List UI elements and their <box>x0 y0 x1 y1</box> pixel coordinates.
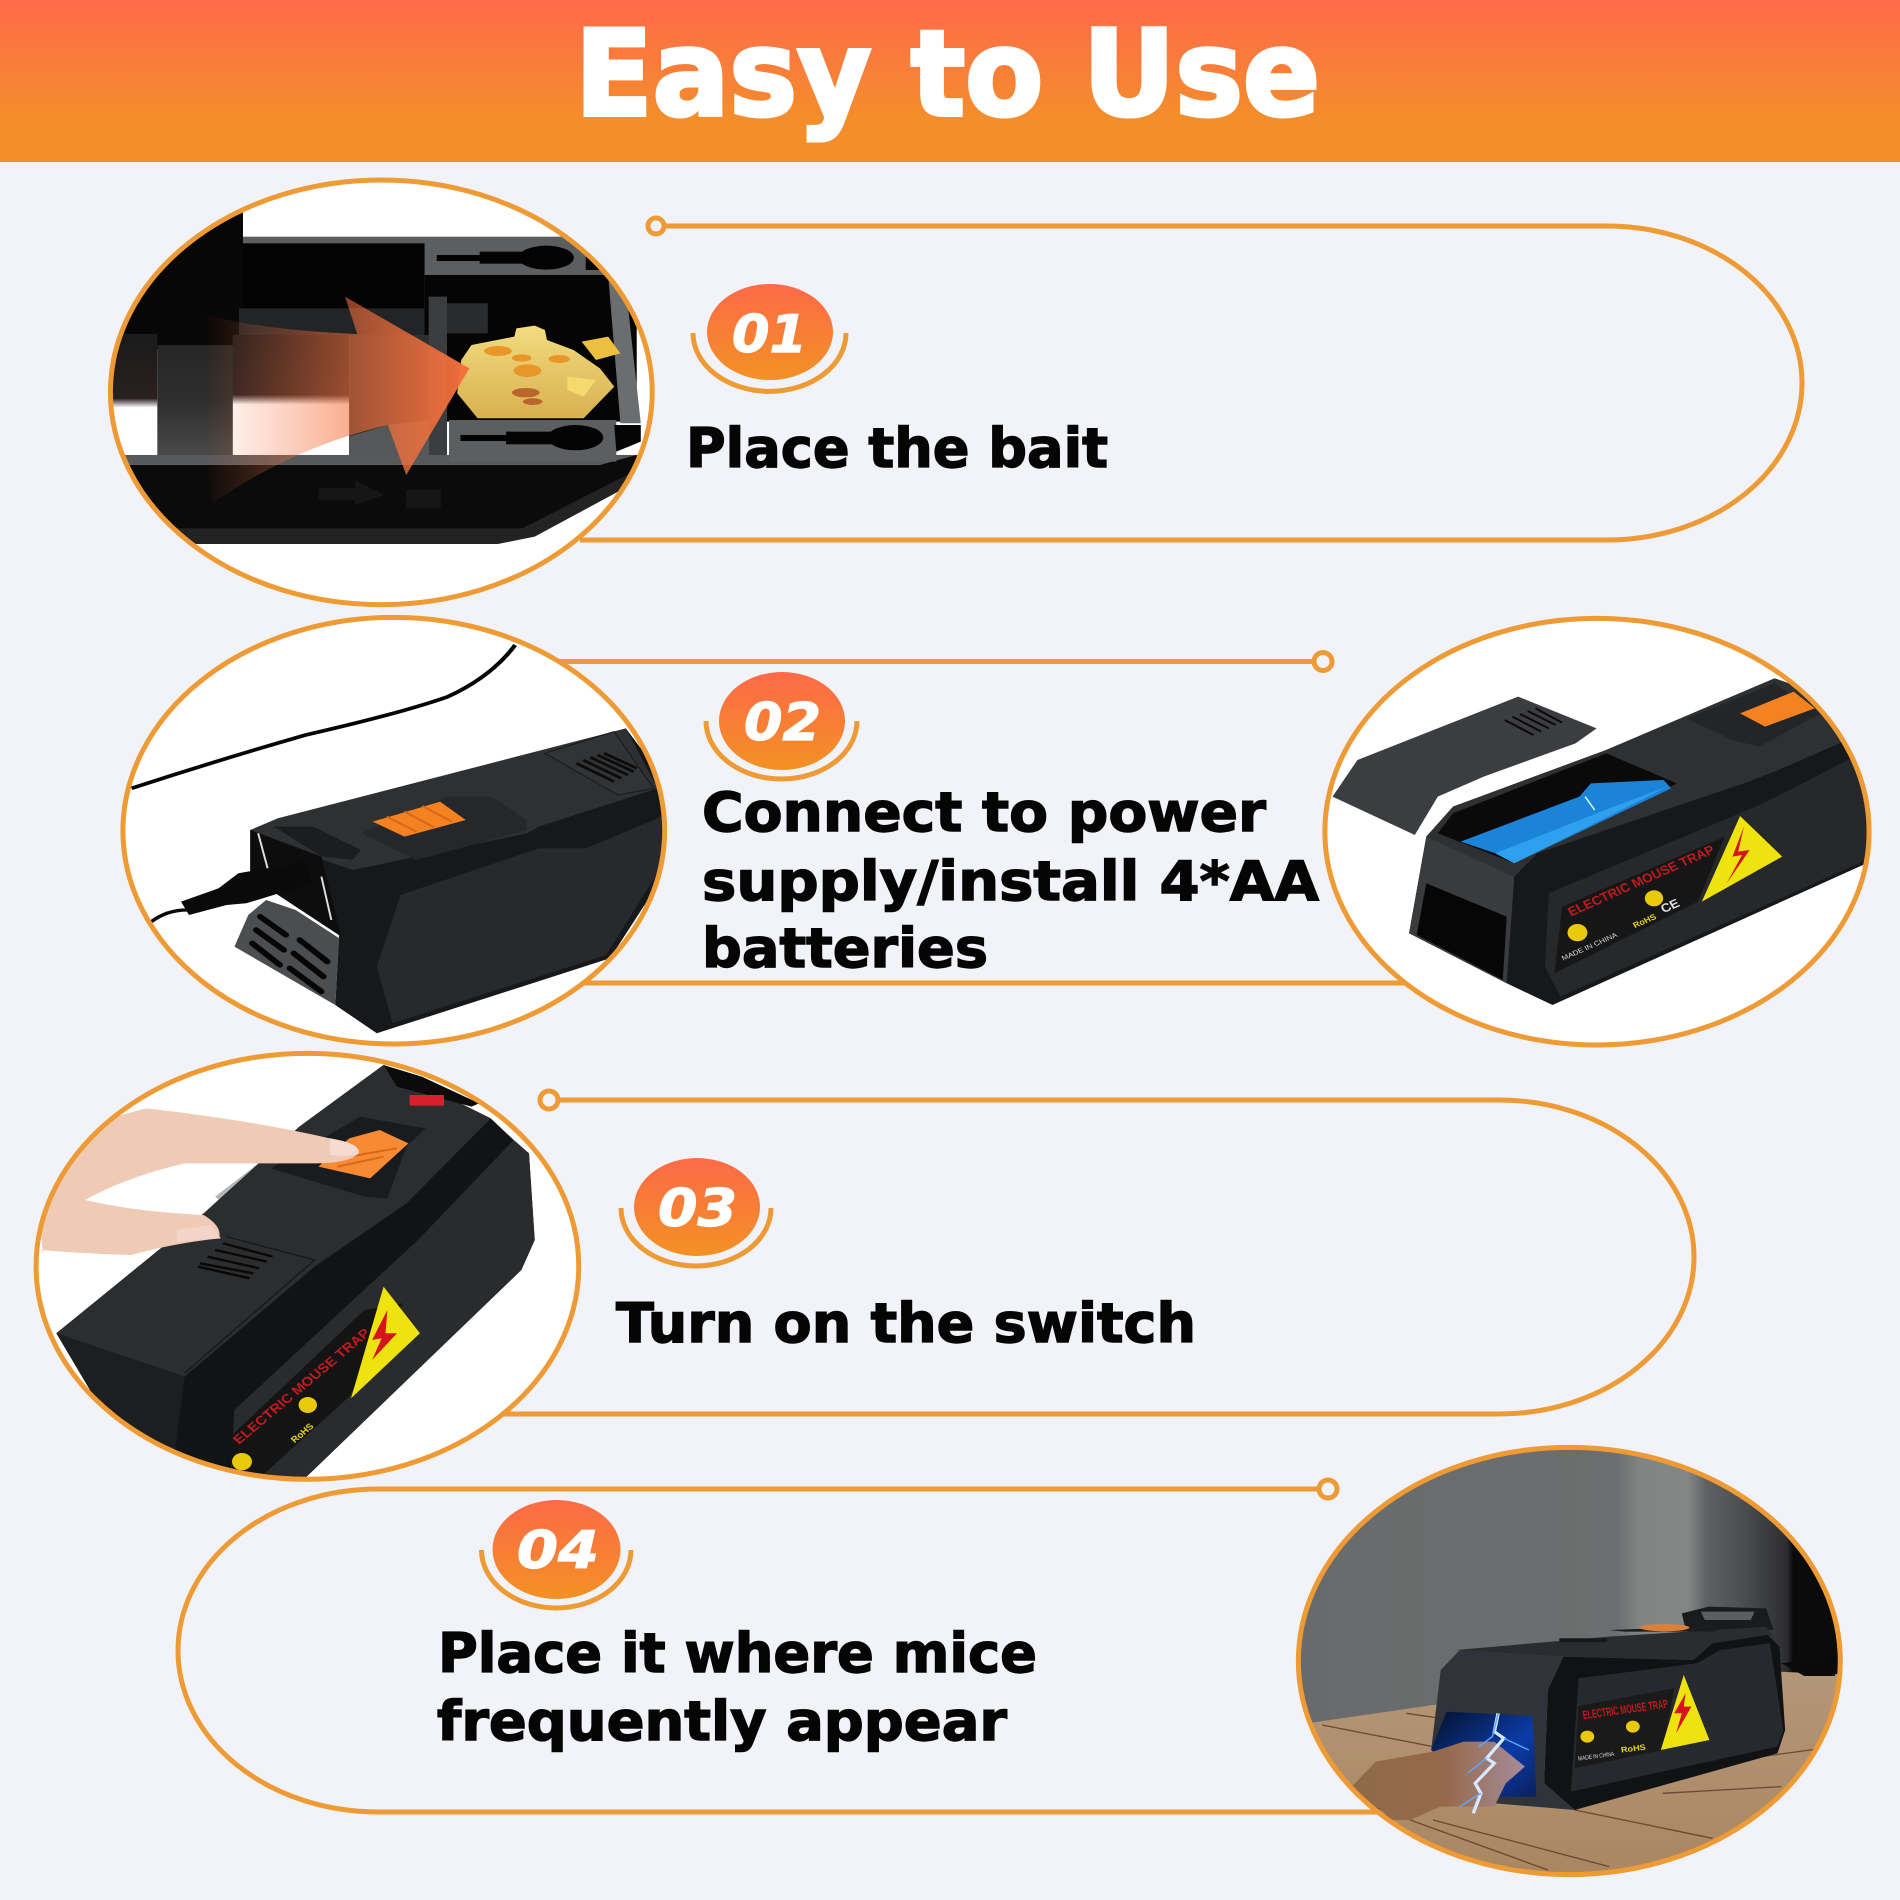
photo ring 1 <box>110 180 652 605</box>
text: step 2: supply/install 4*AA <box>702 850 1319 913</box>
badge 02 <box>706 672 857 779</box>
front <box>1431 1650 1575 1810</box>
badge 01 <box>693 284 846 391</box>
label <box>1554 816 1782 973</box>
handle <box>384 1065 479 1107</box>
photo ring 3 <box>1325 618 1869 1045</box>
photo: finger pressing the switch <box>38 1056 576 1477</box>
switch <box>1687 683 1820 747</box>
hand <box>35 1108 359 1255</box>
label: MADE IN CHINA <box>1578 1751 1615 1762</box>
top <box>1456 1627 1774 1660</box>
photo: trap on wood floor with mouse <box>1300 1450 1838 1872</box>
body backing <box>56 1065 535 1480</box>
badge 04: 04 <box>517 1521 599 1581</box>
mouse <box>1347 1742 1525 1820</box>
body top <box>250 728 658 870</box>
text: step 4 <box>437 1622 1037 1753</box>
body backing <box>1409 678 1874 1005</box>
panel outline: step 1 <box>580 218 1802 540</box>
text: step 2: Connect to power <box>702 781 1266 844</box>
text: step 2: batteries <box>702 917 988 980</box>
side <box>1544 1635 1785 1810</box>
badge 02: 02 <box>744 693 821 753</box>
photo: trap connected to power cable <box>126 620 662 1042</box>
lock mark <box>318 480 441 508</box>
text: step 4: frequently appear <box>437 1690 1007 1753</box>
photo: bait compartment with arrow <box>112 182 650 602</box>
photo ring 5 <box>1298 1447 1840 1875</box>
side face <box>230 1140 535 1480</box>
badge 04 <box>482 1500 631 1608</box>
body backing <box>250 728 669 1033</box>
label <box>1575 1675 1709 1768</box>
label <box>230 1287 420 1480</box>
vent panel <box>234 900 339 1005</box>
text: step 3: Turn on the switch <box>616 1292 1196 1355</box>
top face <box>56 1065 491 1377</box>
panel outline: step 3 <box>500 1091 1694 1414</box>
lid <box>1333 697 1597 835</box>
lightning <box>1473 1713 1504 1813</box>
photo: open battery compartment <box>1328 621 1867 1042</box>
switch plate <box>361 797 527 860</box>
text: step 4: Place it where mice <box>438 1622 1037 1685</box>
label: ELECTRIC MOUSE TRAP <box>1565 843 1717 919</box>
photo ring 2 <box>123 617 665 1044</box>
label: MADE IN CHINA <box>1560 931 1619 962</box>
header banner <box>0 0 1900 162</box>
lid outline and slats <box>185 1237 315 1373</box>
floor <box>1312 1672 1838 1872</box>
handle <box>1682 1607 1774 1630</box>
front opening <box>250 830 341 937</box>
label: RoHS <box>1631 912 1658 930</box>
panel outline: step 2 <box>550 652 1410 983</box>
battery bay <box>1438 753 1677 863</box>
badge 03 <box>621 1158 771 1266</box>
label: RoHS <box>1620 1742 1647 1754</box>
panel outline: step 4 <box>178 1480 1385 1812</box>
text: step 2 <box>702 781 1319 980</box>
body top <box>1426 678 1870 877</box>
plug <box>151 910 187 922</box>
badge 03: 03 <box>658 1179 737 1239</box>
front <box>1409 837 1514 983</box>
title: Easy to Use <box>575 6 1320 144</box>
badge 01: 01 <box>732 305 807 365</box>
keyhole slots <box>437 246 603 450</box>
switch <box>271 1117 426 1198</box>
text: step 1: Place the bait <box>686 417 1108 480</box>
arrow <box>188 297 469 503</box>
photo ring 4 <box>36 1053 579 1479</box>
cheese <box>457 326 620 418</box>
label: RoHS <box>289 1422 316 1445</box>
label: ELECTRIC MOUSE TRAP <box>1581 1697 1669 1722</box>
label: CE <box>1658 896 1682 916</box>
front cap <box>56 1333 185 1453</box>
label: ELECTRIC MOUSE TRAP <box>230 1326 373 1447</box>
